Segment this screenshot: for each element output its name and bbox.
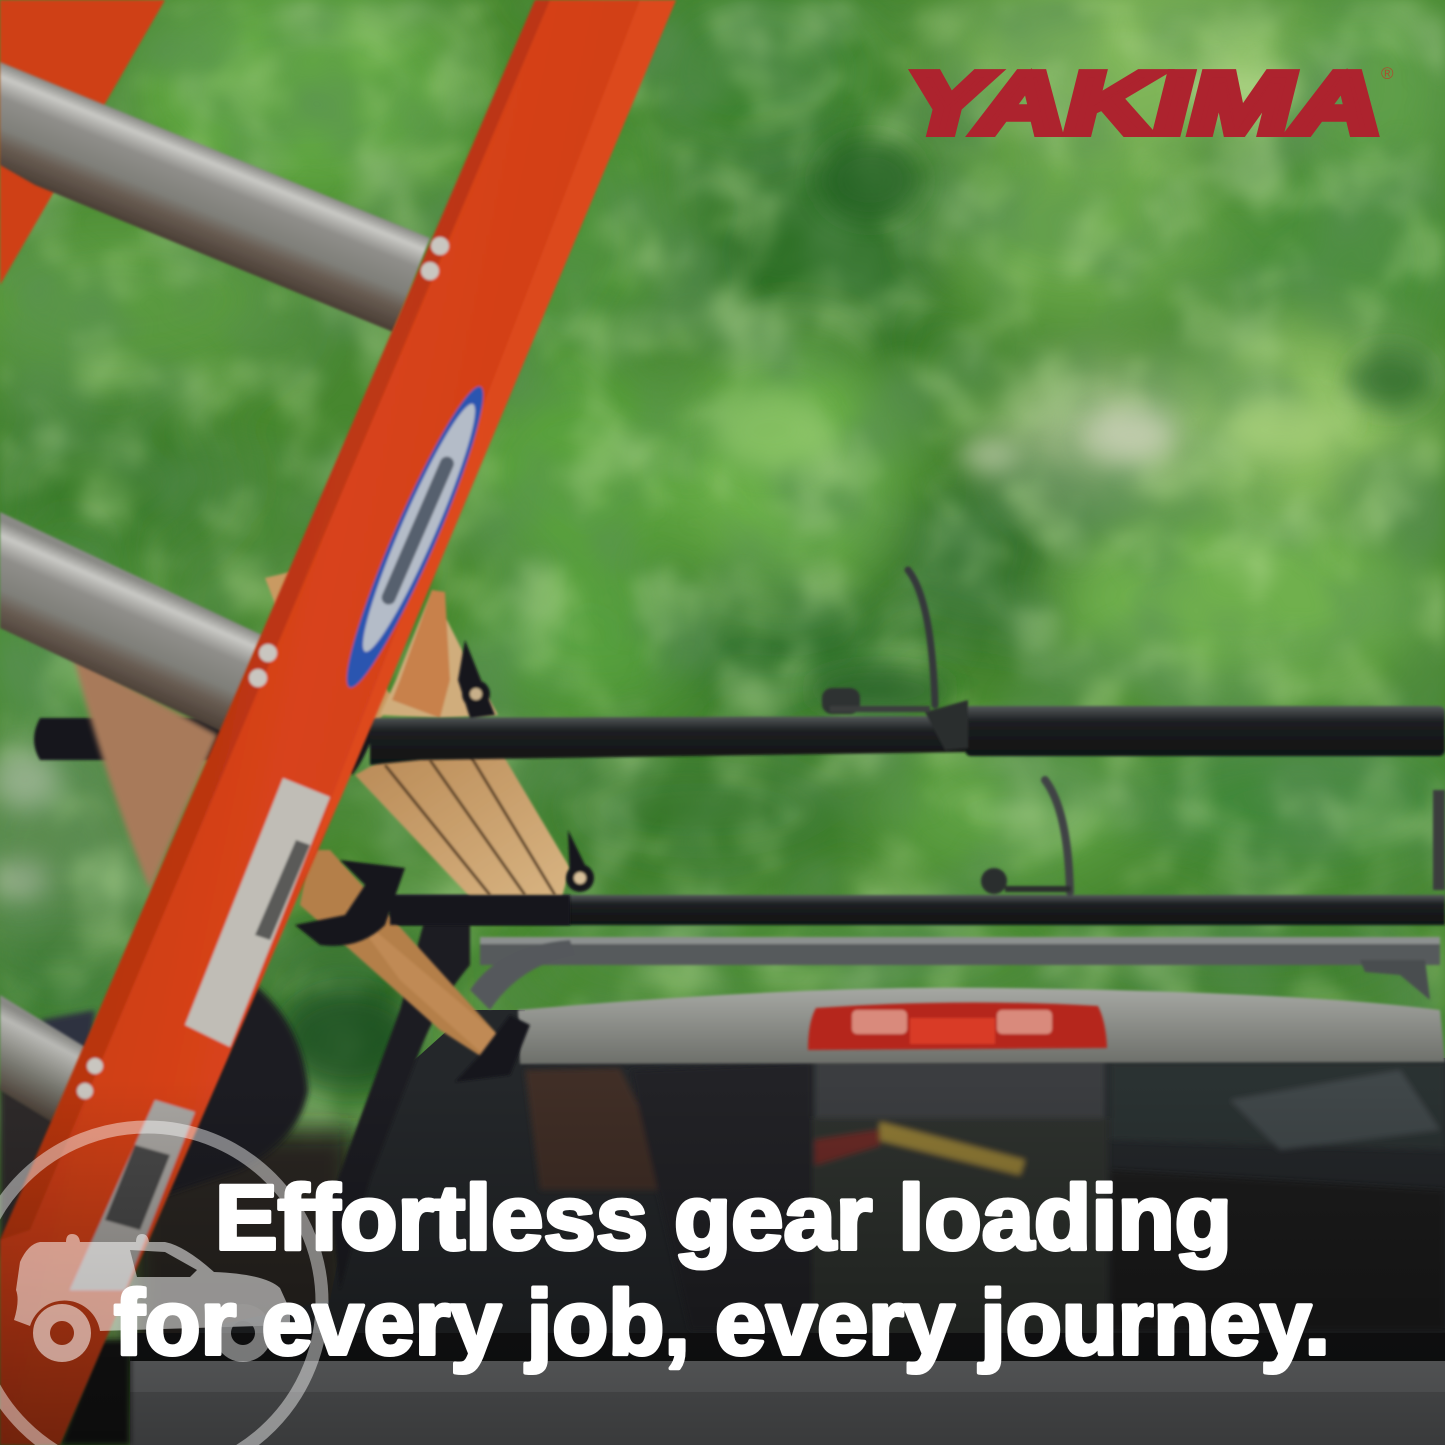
rung rivets — [77, 237, 449, 1099]
lower roof rack — [330, 780, 1445, 1290]
vehicle silhouette — [14, 1234, 290, 1331]
truck roof — [518, 988, 1445, 1064]
truck cab and rear window — [130, 988, 1445, 1445]
person's hand and dark jacket — [0, 645, 308, 1445]
ladder rungs — [0, 62, 430, 1122]
ladder brand label — [330, 378, 500, 696]
orange fibreglass ladder rail — [0, 0, 676, 1445]
bottom shade overlay — [0, 1080, 1445, 1445]
truck bed rail — [130, 1333, 1445, 1445]
vehicle badge icon — [0, 1127, 322, 1445]
logo wordmark: YAKIMA — [895, 54, 1396, 152]
third brake light — [808, 1002, 1107, 1050]
dark foreground behind ladder — [130, 1130, 355, 1370]
rear wheel — [33, 1304, 91, 1362]
ladder warning label lower — [70, 1100, 195, 1290]
cab side and cabin interior — [130, 1010, 1445, 1445]
badge ring — [0, 1127, 322, 1445]
rail highlights — [300, 0, 676, 880]
upper roof rack crossbar — [34, 570, 1445, 1082]
headline line 2: for every job, every journey. — [114, 1272, 1330, 1374]
upper left ladder rail — [0, 0, 165, 285]
registered mark: ® — [1381, 64, 1394, 83]
lumber brackets — [295, 640, 594, 1082]
rack stanchion knob and hook — [822, 570, 935, 714]
Yakima logo — [895, 54, 1396, 152]
ladder warning label upper — [185, 778, 330, 1047]
window reflections — [525, 1060, 1445, 1338]
front wheel — [214, 1304, 272, 1362]
headline line 1: Effortless gear loading — [215, 1167, 1232, 1269]
stacked lumber boards — [265, 572, 570, 1066]
headline — [114, 1167, 1330, 1374]
